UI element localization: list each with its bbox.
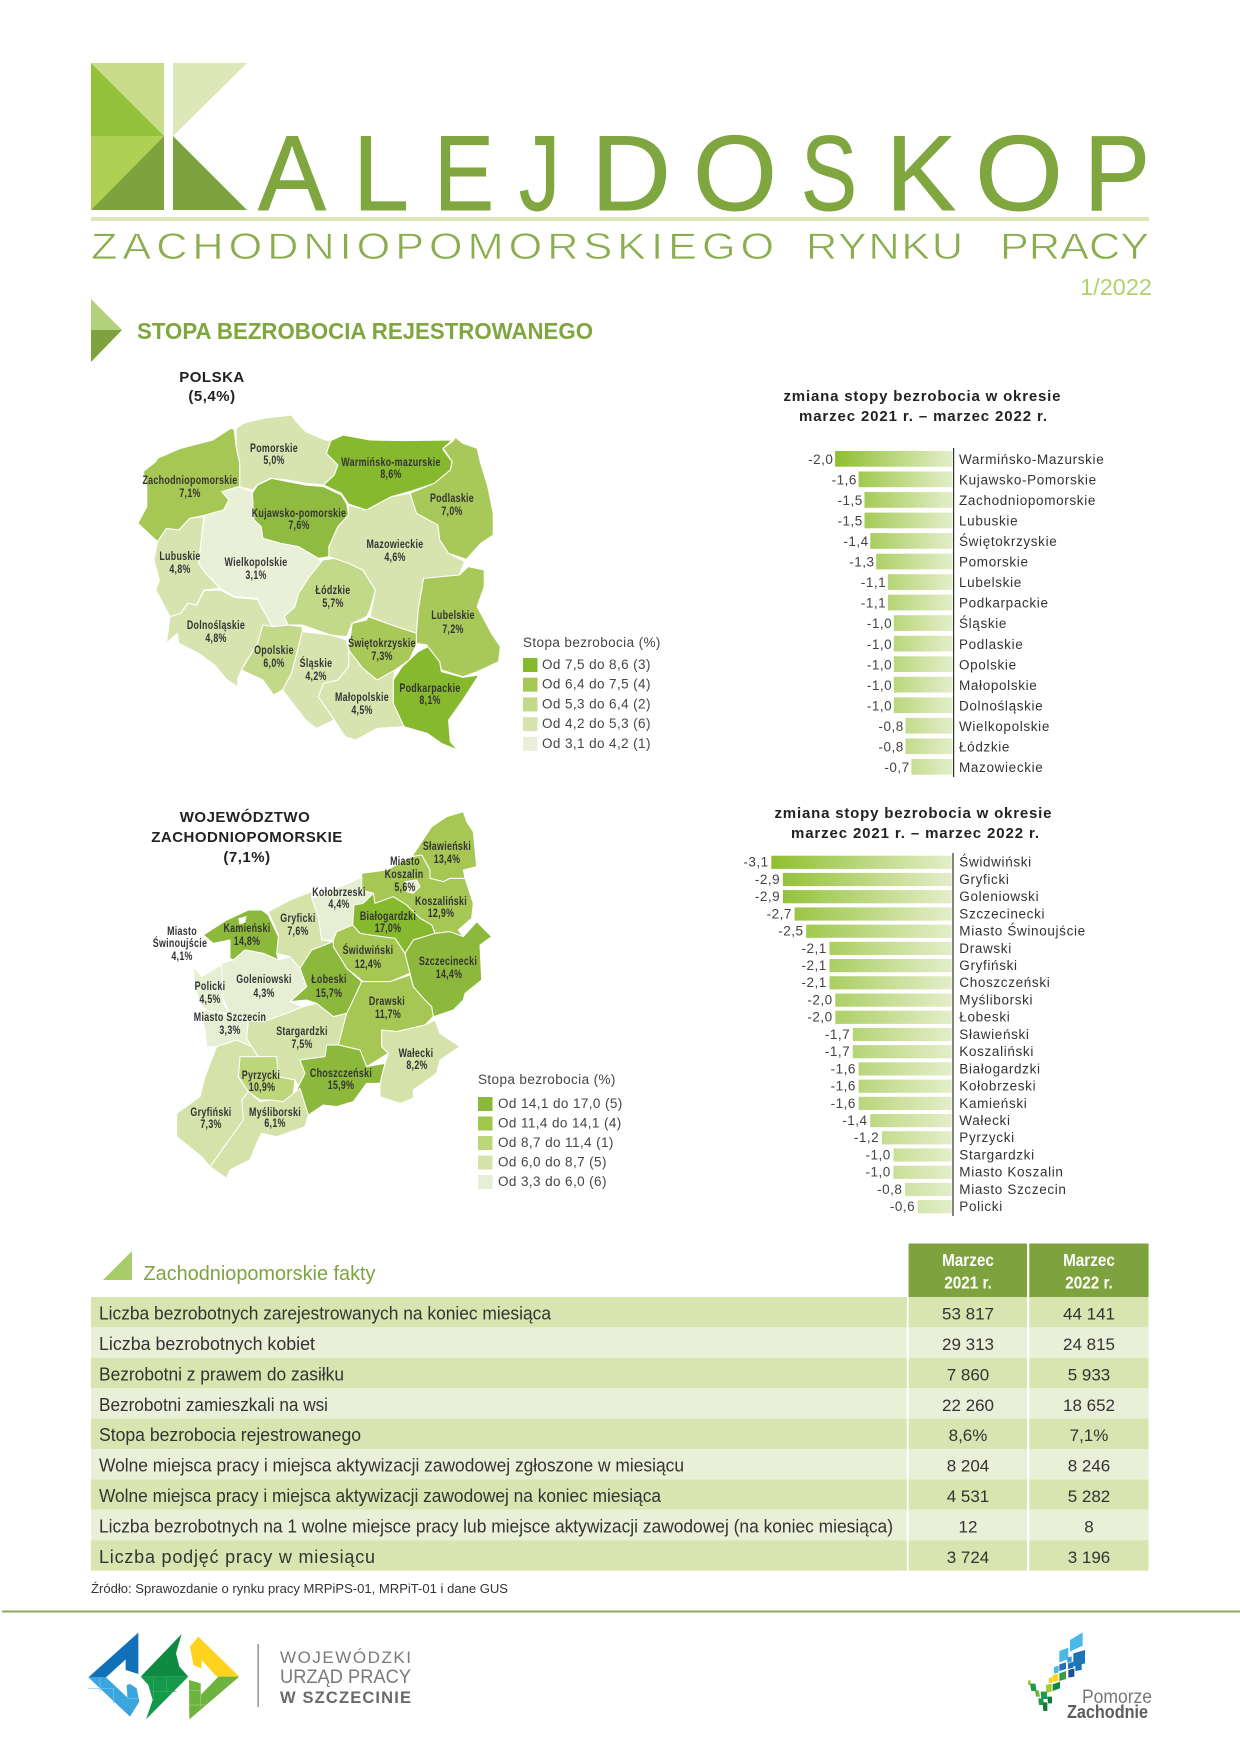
map labels: Zachodniopomorskie: Białogardzki: [360, 910, 416, 923]
legend: Poland: Stopa bezrobocia (%): [523, 635, 661, 650]
map labels: Zachodniopomorskie: Myśliborski: [249, 1106, 301, 1119]
bar chart: Zachodniopomorskie change by county: -2,7: [767, 906, 792, 921]
bar chart: Zachodniopomorskie change by county: -1,6: [831, 1096, 856, 1111]
table rows: 8 246: [1068, 1457, 1110, 1476]
map labels: Zachodniopomorskie: 8,2%: [406, 1059, 428, 1072]
bar chart: Poland change by voivodeship: -1,0: [867, 678, 892, 693]
map labels: Zachodniopomorskie: Miasto: [390, 855, 420, 868]
table rows: Stopa bezrobocia rejestrowanego: [99, 1425, 361, 1445]
bar chart: Poland change by voivodeship: -1,1: [861, 596, 886, 611]
map labels: Poland: 7,2%: [442, 623, 464, 636]
map labels: Zachodniopomorskie: 4,5%: [199, 993, 221, 1006]
map labels: Zachodniopomorskie: 7,6%: [287, 925, 309, 938]
title: ALEJDOSKOP: E: [434, 113, 494, 233]
subtitle: ZACHODNIOPOMORSKIEGO: [91, 225, 774, 267]
bar chart: Poland change by voivodeship: -0,8: [879, 739, 904, 754]
logo text: Wojewódzki Urząd Pracy w Szczecinie: URZĄD PRACY: [280, 1666, 411, 1688]
map labels: Poland: 7,3%: [371, 650, 393, 663]
logo text: Pomorze Zachodnie: Pomorze: [1082, 1687, 1152, 1708]
map labels: Zachodniopomorskie: Stargardzki: [276, 1025, 328, 1038]
map labels: Zachodniopomorskie: Choszczeński: [310, 1067, 372, 1080]
issue number: 1/2022: [1080, 274, 1152, 300]
map labels: Poland: Podlaskie: [430, 492, 474, 505]
map labels: Zachodniopomorskie: Pyrzycki: [242, 1069, 280, 1082]
logo text: Pomorze Zachodnie: [1067, 1687, 1152, 1722]
table rows: Liczba bezrobotnych zarejestrowanych na koniec miesiąca: [99, 1304, 552, 1324]
bar chart: Poland change by voivodeship: Pomorskie: [959, 555, 1029, 570]
map labels: Poland: 4,8%: [169, 563, 191, 576]
bar chart: Zachodniopomorskie change by county: Sławieński: [959, 1027, 1030, 1042]
map labels: Poland: Mazowieckie: [366, 538, 424, 551]
table rows: [91, 1297, 1149, 1571]
bar chart title: Poland: zmiana stopy bezrobocia w okresie: [784, 388, 1060, 405]
title: ALEJDOSKOP: O: [693, 113, 777, 233]
bar chart: Zachodniopomorskie change by county: Gryfiński: [959, 958, 1018, 973]
map labels: Poland: Lubuskie: [159, 550, 201, 563]
map labels: Poland: Śląskie: [300, 656, 332, 670]
bar chart: Zachodniopomorskie change by county: -1,7: [825, 1044, 850, 1059]
map labels: Poland: Lubelskie: [431, 609, 475, 622]
logo text: Wojewódzki Urząd Pracy w Szczecinie: WOJEWÓDZKI: [280, 1648, 411, 1667]
bar chart: Poland change by voivodeship: [808, 448, 1104, 777]
bar chart title: Zachodniopomorskie: zmiana stopy bezrobocia w okresie: [774, 805, 1052, 822]
map labels: Poland: 4,6%: [384, 551, 406, 564]
map labels: Poland: Dolnośląskie: [187, 619, 245, 632]
bar chart: Poland change by voivodeship: -1,0: [867, 637, 892, 652]
map labels: Poland: 8,6%: [380, 468, 402, 481]
title: ALEJDOSKOP: D: [591, 113, 671, 233]
map labels: Zachodniopomorskie: 14,4%: [436, 968, 463, 981]
bar chart: Zachodniopomorskie change by county: Drawski: [959, 941, 1012, 956]
map labels: Poland: 4,5%: [351, 704, 373, 717]
bar chart title: Poland: [784, 388, 1060, 425]
table rows: 12: [959, 1517, 977, 1536]
bar chart: Zachodniopomorskie change by county: -1,4: [842, 1113, 868, 1128]
map labels: Poland: 7,6%: [288, 519, 310, 532]
title: ALEJDOSKOP: S: [801, 113, 857, 233]
table header: March 2021: Marzec: [942, 1250, 994, 1270]
bar chart: Poland change by voivodeship: -1,0: [867, 616, 892, 631]
table rows: Liczba podjęć pracy w miesiącu: [99, 1547, 375, 1567]
bar chart: Poland change by voivodeship: -1,5: [838, 493, 863, 508]
logo: kaleidoscope letter K: [91, 63, 247, 210]
table header: March 2022: [1029, 1244, 1149, 1297]
bar chart: Zachodniopomorskie change by county: -2,0: [807, 992, 833, 1008]
table rows: 3 724: [947, 1548, 989, 1567]
map labels: Zachodniopomorskie: 7,3%: [200, 1118, 222, 1131]
map labels: Zachodniopomorskie: Wałecki: [399, 1047, 433, 1060]
legend: Zachodniopomorskie: Stopa bezrobocia (%): [478, 1072, 616, 1087]
title: ALEJDOSKOP: K: [886, 113, 956, 233]
legend: Poland: Od 6,4 do 7,5 (4): [542, 677, 651, 692]
bar chart title: Zachodniopomorskie: [774, 805, 1052, 842]
bar chart title: Poland: marzec 2021 r. – marzec 2022 r.: [799, 408, 1047, 425]
bar chart: Zachodniopomorskie change by county: Szczecinecki: [959, 906, 1045, 921]
table rows: 24 815: [1063, 1335, 1115, 1354]
logo: Wojewódzki Urząd Pracy icon: [88, 1633, 239, 1719]
map labels: Poland: 4,8%: [205, 632, 227, 645]
bar chart: Poland change by voivodeship: Małopolskie: [959, 678, 1037, 693]
bar chart: Poland change by voivodeship: -1,6: [832, 472, 857, 488]
map labels: Zachodniopomorskie: 3,3%: [219, 1024, 241, 1037]
map labels: Zachodniopomorskie: 15,9%: [328, 1079, 355, 1092]
table heading: Zachodniopomorskie fakty: Zachodniopomorskie fakty: [144, 1263, 376, 1285]
map labels: Zachodniopomorskie: 7,5%: [291, 1038, 313, 1051]
bar chart: Poland change by voivodeship: Wielkopolskie: [959, 719, 1050, 734]
legend: Poland: Od 4,2 do 5,3 (6): [542, 716, 651, 731]
title: ALEJDOSKOP: O: [975, 113, 1063, 233]
map labels: Zachodniopomorskie: 10,9%: [249, 1081, 276, 1094]
bar chart: Zachodniopomorskie change by county: Koszaliński: [959, 1044, 1034, 1059]
legend: Zachodniopomorskie: Od 11,4 do 14,1 (4): [498, 1116, 622, 1130]
table rows: Bezrobotni z prawem do zasiłku: [99, 1364, 344, 1384]
map labels: Zachodniopomorskie: Miasto Szczecin: [194, 1011, 266, 1024]
legend: Zachodniopomorskie: Od 14,1 do 17,0 (5): [498, 1096, 623, 1111]
map labels: Poland: 3,1%: [245, 569, 267, 582]
map labels: Poland: Łódzkie: [315, 584, 351, 597]
subtitle: PRACY: [1000, 225, 1149, 267]
heading: Zachodniopomorskie voivodeship: WOJEWÓDZTWO: [180, 808, 310, 826]
map labels: Zachodniopomorskie: Goleniowski: [236, 973, 292, 986]
map labels: Poland: 7,1%: [179, 487, 201, 500]
title: ALEJDOSKOP: J: [519, 113, 560, 233]
logo text: Pomorze Zachodnie: Zachodnie: [1067, 1702, 1148, 1722]
bar chart: Poland change by voivodeship: -1,1: [861, 575, 886, 590]
logo text: Wojewódzki Urząd Pracy w Szczecinie: [280, 1648, 411, 1707]
map labels: Poland: 5,7%: [322, 597, 344, 610]
map labels: Poland: Opolskie: [254, 644, 294, 657]
map labels: Poland: 5,0%: [263, 454, 285, 467]
bar chart: Zachodniopomorskie change by county: -1,0: [866, 1147, 891, 1162]
section heading: STOPA BEZROBOCIA REJESTROWANEGO: [137, 318, 593, 344]
map labels: Zachodniopomorskie: 5,6%: [394, 881, 416, 894]
table header: March 2021: [909, 1244, 1027, 1297]
table rows: 5 933: [1068, 1365, 1110, 1384]
table rows: 8 204: [947, 1457, 989, 1476]
bar chart: Poland change by voivodeship: -1,0: [867, 698, 892, 713]
table rows: Wolne miejsca pracy i miejsca aktywizacji zawodowej na koniec miesiąca: [99, 1486, 662, 1506]
bar chart: Poland change by voivodeship: Opolskie: [959, 657, 1017, 672]
map labels: Zachodniopomorskie: Kołobrzeski: [312, 886, 366, 899]
legend: Poland: Od 5,3 do 6,4 (2): [542, 696, 651, 711]
bar chart: Zachodniopomorskie change by county: Goleniowski: [959, 889, 1039, 904]
legend: Poland: [523, 635, 661, 751]
bar chart: Zachodniopomorskie change by county: -0,8: [877, 1182, 902, 1197]
map labels: Zachodniopomorskie: 15,7%: [316, 987, 343, 1000]
map labels: Zachodniopomorskie: Koszalin: [385, 868, 423, 881]
subtitle: [91, 225, 1149, 267]
bar chart: Zachodniopomorskie change by county: Miasto Koszalin: [959, 1165, 1064, 1180]
table rows: Liczba bezrobotnych na 1 wolne miejsce pracy lub miejsce aktywizacji zawodowej (na koniec miesiąca): [99, 1516, 893, 1536]
table rows: 7 860: [947, 1365, 989, 1384]
map labels: Zachodniopomorskie: Kamieński: [223, 922, 271, 935]
bar chart: Zachodniopomorskie change by county: -1,2: [854, 1130, 879, 1145]
table rows: 3 196: [1068, 1548, 1110, 1567]
map labels: Zachodniopomorskie: Gryfiński: [190, 1106, 232, 1119]
bar chart: Poland change by voivodeship: Kujawsko-Pomorskie: [959, 472, 1097, 488]
table rows: Bezrobotni zamieszkali na wsi: [99, 1395, 328, 1415]
bar chart: Zachodniopomorskie change by county: Choszczeński: [959, 975, 1050, 990]
table rows: 18 652: [1063, 1396, 1115, 1415]
bar chart: Zachodniopomorskie change by county: -2,0: [807, 1010, 833, 1025]
map labels: Poland: Świętokrzyskie: [348, 636, 416, 650]
bar chart: Zachodniopomorskie change by county: -1,0: [866, 1165, 891, 1180]
map labels: Zachodniopomorskie: 12,9%: [428, 907, 455, 920]
bar chart: Zachodniopomorskie change by county: -0,6: [890, 1199, 915, 1214]
map labels: Poland: 4,2%: [305, 670, 327, 683]
bar chart: Zachodniopomorskie change by county: Miasto Szczecin: [959, 1182, 1067, 1197]
heading: Zachodniopomorskie voivodeship: ZACHODNIOPOMORSKIE: [151, 829, 343, 846]
table rows: 22 260: [942, 1396, 994, 1415]
bar chart: Poland change by voivodeship: -1,3: [849, 555, 874, 570]
legend: Zachodniopomorskie: Od 3,3 do 6,0 (6): [498, 1174, 607, 1189]
bar chart: Zachodniopomorskie change by county: Łobeski: [959, 1010, 1010, 1025]
map labels: Zachodniopomorskie: 17,0%: [375, 922, 402, 935]
title: ALEJDOSKOP: [258, 113, 1150, 233]
table heading: Zachodniopomorskie fakty: [103, 1251, 376, 1285]
logo: Pomorze Zachodnie icon: [1028, 1632, 1085, 1711]
bar chart: Poland change by voivodeship: Świętokrzyskie: [959, 534, 1057, 549]
heading: Polska: POLSKA: [179, 369, 245, 386]
legend: Zachodniopomorskie: [478, 1072, 623, 1189]
table rows: 5 282: [1068, 1487, 1110, 1506]
map labels: Zachodniopomorskie: 12,4%: [355, 958, 382, 971]
table header: March 2022: 2022 r.: [1065, 1272, 1113, 1293]
bar chart: Zachodniopomorskie change by county: -2,1: [802, 975, 827, 990]
map labels: Poland: Zachodniopomorskie: [142, 474, 238, 487]
table rows: 7,1%: [1070, 1426, 1108, 1445]
table rows: Wolne miejsca pracy i miejsca aktywizacji zawodowej zgłoszone w miesiącu: [99, 1456, 684, 1476]
bar chart: Zachodniopomorskie change by county: -2,1: [802, 958, 827, 973]
section marker icon: [91, 299, 122, 362]
bar chart: Poland change by voivodeship: Śląskie: [959, 616, 1007, 631]
table rows: Liczba bezrobotnych kobiet: [99, 1334, 315, 1354]
bar chart: Zachodniopomorskie change by county: -1,6: [831, 1061, 856, 1076]
bar chart: Zachodniopomorskie change by county: -3,1: [743, 855, 769, 870]
map labels: Zachodniopomorskie: 4,3%: [253, 987, 275, 1000]
table rows: 53 817: [942, 1304, 994, 1324]
title: ALEJDOSKOP: L: [353, 113, 409, 233]
map labels: Zachodniopomorskie: Sławieński: [423, 840, 471, 853]
bar chart title: Zachodniopomorskie: marzec 2021 r. – marzec 2022 r.: [791, 825, 1039, 842]
bar chart: Zachodniopomorskie change by county: [743, 853, 1086, 1216]
bar chart: Poland change by voivodeship: Mazowieckie: [959, 760, 1043, 775]
title: ALEJDOSKOP: P: [1084, 113, 1150, 233]
bar chart: Zachodniopomorskie change by county: Kołobrzeski: [959, 1079, 1036, 1094]
map labels: Zachodniopomorskie: Szczecinecki: [419, 955, 477, 968]
map labels: Zachodniopomorskie: Drawski: [369, 995, 405, 1008]
map labels: Zachodniopomorskie: Koszaliński: [415, 895, 467, 908]
map labels: Zachodniopomorskie: 13,4%: [434, 853, 461, 866]
title: ALEJDOSKOP: A: [258, 113, 327, 233]
legend: Poland: Od 3,1 do 4,2 (1): [542, 736, 651, 751]
table header: March 2022: Marzec: [1063, 1250, 1115, 1270]
legend: Zachodniopomorskie: Od 6,0 do 8,7 (5): [498, 1154, 607, 1170]
bar chart: Zachodniopomorskie change by county: Myśliborski: [959, 992, 1033, 1008]
map labels: Poland: Pomorskie: [250, 442, 298, 455]
heading: Polska: (5,4%): [188, 388, 236, 405]
bar chart: Zachodniopomorskie change by county: -2,5: [778, 924, 804, 939]
bar chart: Zachodniopomorskie change by county: -1,7: [825, 1027, 850, 1042]
map labels: Zachodniopomorskie: [153, 840, 477, 1131]
map labels: Poland: Kujawsko-pomorskie: [252, 507, 346, 520]
bar chart: Poland change by voivodeship: Podkarpackie: [959, 596, 1049, 611]
map labels: Zachodniopomorskie: Łobeski: [311, 973, 347, 986]
map labels: Poland: [142, 442, 475, 717]
bar chart: Poland change by voivodeship: Podlaskie: [959, 637, 1023, 652]
map: Zachodniopomorskie counties: [153, 812, 492, 1178]
bar chart: Zachodniopomorskie change by county: Świdwiński: [959, 855, 1032, 870]
map labels: Poland: 7,0%: [441, 505, 463, 518]
table: facts: [91, 1244, 1149, 1571]
map labels: Zachodniopomorskie: Policki: [195, 980, 225, 993]
bar chart: Poland change by voivodeship: Lubelskie: [959, 575, 1022, 590]
bar chart: Poland change by voivodeship: -0,7: [884, 760, 910, 775]
bar chart: Zachodniopomorskie change by county: Białogardzki: [959, 1061, 1041, 1076]
table rows: 44 141: [1063, 1304, 1115, 1324]
subtitle: RYNKU: [806, 225, 963, 267]
bar chart: Poland change by voivodeship: -2,0: [808, 452, 833, 467]
map labels: Zachodniopomorskie: 6,1%: [264, 1117, 286, 1130]
heading: Zachodniopomorskie voivodeship: (7,1%): [223, 849, 271, 866]
map labels: Poland: 8,1%: [419, 694, 441, 707]
table rows: 8,6%: [949, 1426, 987, 1445]
table rows: 29 313: [942, 1335, 994, 1354]
legend: Poland: Od 7,5 do 8,6 (3): [542, 657, 651, 672]
source note: Źródło: Sprawozdanie o rynku pracy MRPiPS-01, MRPiT-01 i dane GUS: [91, 1581, 508, 1596]
map labels: Zachodniopomorskie: Gryficki: [280, 912, 316, 925]
heading: Zachodniopomorskie voivodeship: [151, 808, 343, 866]
map labels: Poland: Warmińsko-mazurskie: [341, 456, 441, 469]
map labels: Poland: Wielkopolskie: [225, 556, 287, 569]
bar chart: Zachodniopomorskie change by county: Miasto Świnoujście: [959, 924, 1086, 939]
map labels: Zachodniopomorskie: Świdwiński: [343, 943, 393, 957]
bar chart: Poland change by voivodeship: Dolnośląskie: [959, 698, 1043, 713]
bar chart: Poland change by voivodeship: Lubuskie: [959, 514, 1018, 529]
map labels: Zachodniopomorskie: 14,8%: [234, 935, 261, 948]
table rows: 4 531: [947, 1487, 989, 1506]
map labels: Poland: Małopolskie: [335, 691, 389, 704]
bar chart: Poland change by voivodeship: -1,0: [867, 657, 892, 672]
bar chart: Zachodniopomorskie change by county: Wałecki: [959, 1113, 1011, 1128]
map labels: Zachodniopomorskie: Miasto: [167, 925, 197, 938]
map labels: Poland: 6,0%: [263, 657, 285, 670]
bar chart: Poland change by voivodeship: -1,4: [843, 534, 869, 549]
map labels: Zachodniopomorskie: Świnoujście: [153, 936, 207, 950]
bar chart: Poland change by voivodeship: -1,5: [838, 514, 863, 529]
bar chart: Zachodniopomorskie change by county: Gryficki: [959, 872, 1010, 887]
bar chart: Poland change by voivodeship: Zachodniopomorskie: [959, 493, 1096, 508]
bar chart: Poland change by voivodeship: Łódzkie: [959, 739, 1010, 754]
bar chart: Zachodniopomorskie change by county: Kamieński: [959, 1096, 1027, 1111]
table header: March 2021: 2021 r.: [944, 1272, 992, 1293]
bar chart: Zachodniopomorskie change by county: -2,1: [802, 941, 827, 956]
heading: Polska: [179, 369, 245, 405]
bar chart: Poland change by voivodeship: Warmińsko-Mazurskie: [959, 452, 1104, 467]
map labels: Zachodniopomorskie: 4,4%: [328, 898, 350, 911]
map: Poland voivodeships: [138, 415, 500, 750]
bar chart: Poland change by voivodeship: -0,8: [879, 719, 904, 734]
bar chart: Zachodniopomorskie change by county: Stargardzki: [959, 1147, 1035, 1162]
bar chart: Zachodniopomorskie change by county: Policki: [959, 1199, 1003, 1214]
map labels: Zachodniopomorskie: 4,1%: [171, 950, 193, 963]
legend: Zachodniopomorskie: Od 8,7 do 11,4 (1): [498, 1135, 614, 1150]
map labels: Zachodniopomorskie: 11,7%: [375, 1008, 401, 1021]
map labels: Poland: Podkarpackie: [399, 682, 461, 695]
bar chart: Zachodniopomorskie change by county: Pyrzycki: [959, 1130, 1015, 1145]
bar chart: Zachodniopomorskie change by county: -1,6: [831, 1079, 856, 1094]
bar chart: Zachodniopomorskie change by county: -2,9: [755, 889, 780, 904]
bar chart: Zachodniopomorskie change by county: -2,9: [755, 872, 780, 887]
table rows: 8: [1084, 1517, 1094, 1536]
logo text: Wojewódzki Urząd Pracy w Szczecinie: W SZCZECINIE: [280, 1689, 411, 1707]
